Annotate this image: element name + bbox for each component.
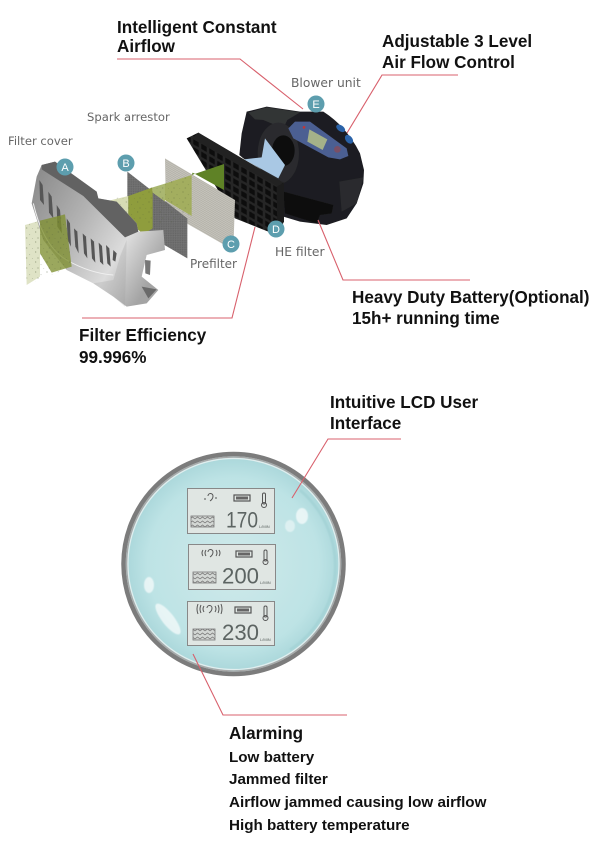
heading: filter efficiency: 99.996% bbox=[79, 348, 146, 367]
heading: adjustable air flow control: Adjustable 3 Level bbox=[382, 32, 532, 51]
lens highlights bbox=[144, 508, 308, 638]
part label: filter cover: Filter cover bbox=[8, 134, 73, 148]
control panel bbox=[288, 122, 348, 159]
lens rim bbox=[124, 454, 344, 674]
housing top highlight bbox=[248, 107, 300, 128]
heading: heavy duty battery: Heavy Duty Battery(Optional) bbox=[352, 288, 589, 307]
part: pale dust sheet bbox=[25, 221, 40, 285]
heading: intelligent constant airflow: Intelligent Constant bbox=[117, 18, 277, 37]
lens inner crescent bbox=[290, 490, 335, 650]
heading: heavy duty battery: 15h+ running time bbox=[352, 309, 500, 328]
adjustment buttons bbox=[335, 123, 355, 145]
badge D: D bbox=[272, 224, 280, 236]
part label: blower unit: Blower unit bbox=[291, 76, 361, 90]
exploded filter assembly: left parts bbox=[25, 133, 284, 307]
leader line: air flow control bbox=[347, 75, 458, 133]
blower housing bbox=[239, 107, 364, 225]
badge C: C bbox=[227, 239, 235, 251]
badge B: B bbox=[122, 158, 130, 170]
lower battery bbox=[283, 192, 333, 223]
heading: intelligent constant airflow bbox=[117, 18, 277, 56]
leader line: alarming bbox=[193, 654, 347, 715]
leader line: battery bbox=[318, 220, 470, 280]
heading: intuitive lcd user interface bbox=[330, 393, 479, 433]
blower unit bbox=[239, 107, 364, 225]
heading: filter efficiency bbox=[79, 326, 207, 367]
part label: he filter: HE filter bbox=[275, 245, 325, 259]
part: he filter block bbox=[187, 133, 284, 235]
lcd screen 170 bbox=[188, 488, 274, 534]
blue filter flap bbox=[244, 138, 285, 178]
lcd screen 230: L/MIN bbox=[260, 637, 271, 642]
part: spark arrestor sheet bbox=[127, 172, 187, 258]
badge A: A bbox=[61, 162, 69, 174]
leader line: lcd interface bbox=[292, 439, 401, 498]
badge E bbox=[308, 96, 324, 112]
part: prefilter sheet bbox=[165, 158, 235, 250]
text block: alarming bbox=[229, 724, 487, 834]
part label: prefilter: Prefilter bbox=[190, 257, 237, 271]
lcd screen 200: 200 bbox=[222, 564, 259, 588]
lcd screen 200 bbox=[188, 544, 276, 590]
text block: alarming: Alarming bbox=[229, 724, 303, 743]
lcd screen 170: 170 bbox=[226, 508, 258, 532]
heading: filter efficiency: Filter Efficiency bbox=[79, 326, 207, 345]
badges bbox=[56, 96, 324, 252]
part: green band over cover bbox=[25, 214, 72, 285]
heading: intelligent constant airflow: Airflow bbox=[117, 37, 176, 56]
text block: alarming: Airflow jammed causing low airflow bbox=[229, 794, 487, 811]
badge E: E bbox=[312, 99, 320, 111]
part: green airflow band bbox=[105, 164, 224, 234]
lcd screen 230 bbox=[188, 602, 274, 646]
leader line: filter efficiency bbox=[82, 227, 255, 318]
heading: intuitive lcd user interface: Interface bbox=[330, 414, 401, 433]
part: filter cover bbox=[32, 162, 165, 307]
leader line: intelligent constant airflow bbox=[117, 59, 303, 109]
heading: intuitive lcd user interface: Intuitive LCD User bbox=[330, 393, 479, 412]
heading: heavy duty battery bbox=[352, 288, 589, 328]
lcd screen 170: L/MIN bbox=[259, 524, 270, 529]
lcd screen 230: 230 bbox=[222, 620, 259, 645]
blower inlet bbox=[258, 123, 299, 184]
lcd screen 200: L/MIN bbox=[260, 580, 271, 585]
badge D bbox=[268, 220, 284, 238]
heading: adjustable air flow control bbox=[382, 32, 532, 72]
text block: alarming: High battery temperature bbox=[229, 817, 410, 834]
battery latch bbox=[339, 177, 363, 212]
badge B bbox=[118, 154, 134, 172]
badge C bbox=[222, 236, 240, 252]
badge A bbox=[56, 158, 74, 176]
heading: adjustable air flow control: Air Flow Control bbox=[382, 53, 515, 72]
text block: alarming: Low battery bbox=[229, 749, 315, 766]
lcd lens bbox=[124, 454, 344, 674]
part label: spark arrestor: Spark arrestor bbox=[87, 110, 170, 124]
text block: alarming: Jammed filter bbox=[229, 771, 328, 788]
